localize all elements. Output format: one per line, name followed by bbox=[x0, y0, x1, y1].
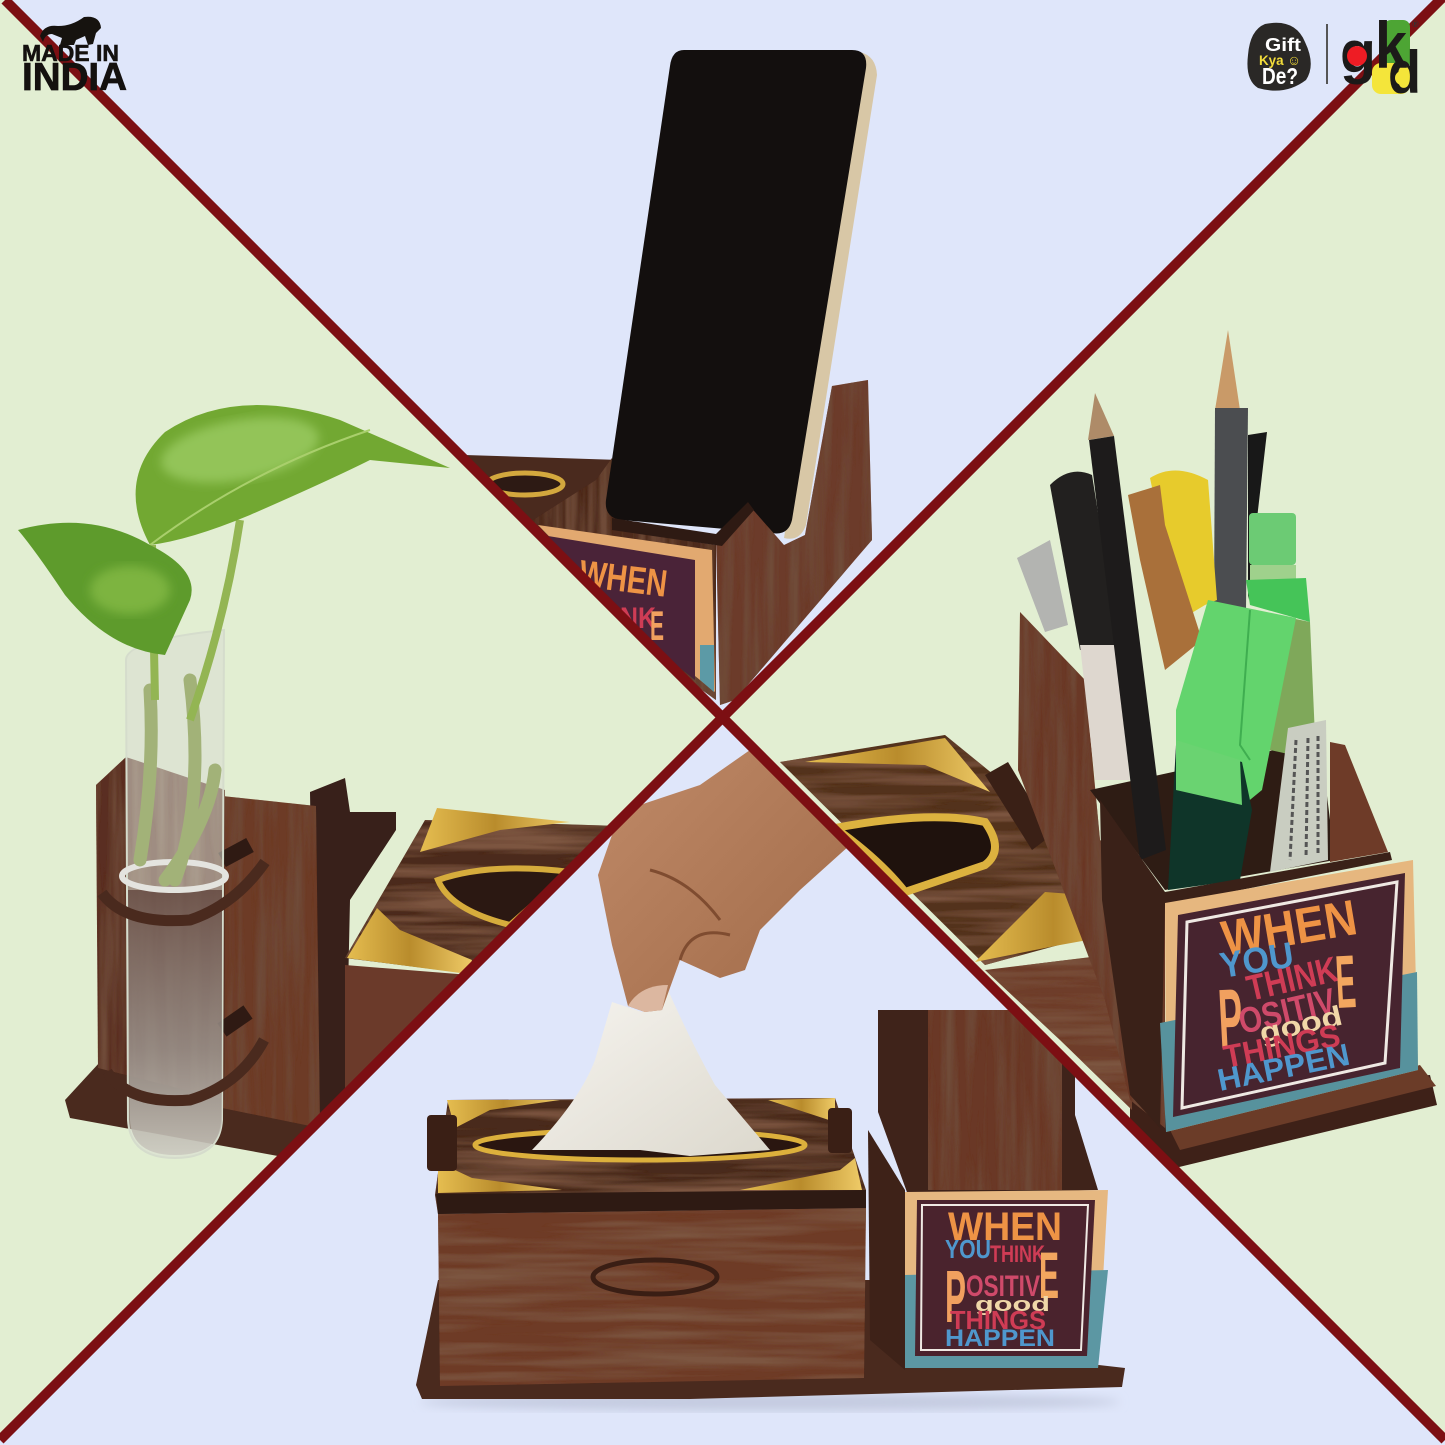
gold corners bbox=[438, 1098, 862, 1193]
text: de: De? bbox=[1262, 63, 1298, 89]
highlighter: collar bbox=[1176, 740, 1242, 805]
text: india: INDIA bbox=[22, 56, 127, 99]
tube: white marker barrel bbox=[1080, 645, 1130, 780]
logo separator bbox=[1326, 24, 1328, 84]
text: kya: Kya ☺ bbox=[1259, 52, 1301, 68]
panel: bottom, tissue box bbox=[416, 745, 1125, 1411]
yellow block bbox=[1372, 63, 1410, 94]
gold corners bbox=[806, 738, 1083, 962]
motivational card: WHEN bbox=[577, 553, 669, 606]
card holder back bbox=[878, 1010, 1098, 1195]
gold corners bbox=[347, 808, 570, 974]
tissue box lid bbox=[435, 1098, 866, 1214]
wooden base bbox=[1130, 1075, 1437, 1168]
yellow counter bbox=[1395, 71, 1409, 85]
background: left green panel bbox=[0, 0, 722, 1440]
tube clips back bbox=[222, 845, 250, 1030]
leaf: large bbox=[136, 405, 450, 545]
card text: YOU bbox=[1217, 934, 1296, 986]
card text: good bbox=[1256, 1000, 1345, 1049]
plant roots bbox=[140, 680, 215, 880]
wooden base bbox=[65, 1064, 308, 1156]
highlighter: dark body bbox=[1168, 745, 1252, 890]
lid tab bbox=[985, 762, 1044, 850]
text: g: g bbox=[1340, 20, 1376, 85]
phone gold edge bbox=[784, 52, 877, 539]
text: d: d bbox=[1388, 39, 1421, 106]
spray bottle bbox=[1246, 513, 1316, 760]
card text: good bbox=[975, 1294, 1050, 1316]
card text: HAPPEN bbox=[945, 1325, 1055, 1352]
back dark wooden panel bbox=[310, 778, 396, 1130]
test tube bbox=[122, 630, 226, 1158]
card text: WHEN bbox=[1218, 889, 1361, 967]
tissue box tabs bbox=[427, 1108, 852, 1171]
wooden panel right of tube bbox=[222, 796, 320, 1128]
text: k: k bbox=[1375, 8, 1407, 82]
pen: silver tip bbox=[1017, 540, 1068, 632]
green block bbox=[1384, 20, 1410, 70]
card text: P bbox=[945, 1255, 966, 1338]
plant stems bbox=[152, 520, 240, 720]
card text: OSITIV bbox=[966, 1270, 1040, 1303]
badge: Made in India bbox=[22, 17, 127, 99]
red dot bbox=[1347, 46, 1367, 66]
card text: THINK bbox=[1243, 948, 1341, 1009]
card text: THINGS bbox=[1220, 1017, 1343, 1075]
phone screen bbox=[606, 50, 866, 533]
holder right wall bbox=[1330, 742, 1388, 862]
tissue box front bbox=[985, 952, 1132, 1110]
background: right green panel bbox=[722, 0, 1445, 1440]
holder front left wall bbox=[1100, 800, 1392, 1128]
card text: E bbox=[1039, 1238, 1059, 1312]
tissue box front bbox=[438, 1208, 866, 1386]
card text bbox=[1214, 889, 1361, 1098]
pen: yellow bbox=[1150, 470, 1217, 620]
wooden panel left of tube bbox=[96, 757, 225, 1100]
stand left wooden wall bbox=[530, 458, 716, 700]
label on tube bbox=[1270, 720, 1328, 872]
logo blob bbox=[1247, 23, 1311, 91]
tube clips front bbox=[102, 862, 265, 1101]
motivational card: NK bbox=[620, 602, 656, 635]
wooden base bbox=[416, 1280, 1125, 1399]
base shadow bbox=[420, 1393, 1120, 1411]
tissue bbox=[532, 990, 770, 1156]
card text: P bbox=[1216, 971, 1245, 1066]
card text bbox=[945, 1205, 1062, 1352]
card holder side wall bbox=[868, 1130, 905, 1370]
grain knot bbox=[593, 1260, 717, 1294]
stand top rim bbox=[612, 502, 754, 546]
card text: E bbox=[1333, 939, 1358, 1024]
lid edge bbox=[436, 1190, 866, 1214]
tissue box lid bbox=[780, 735, 1065, 965]
motivational card: E bbox=[650, 602, 664, 649]
text: gift: Gift bbox=[1265, 35, 1301, 55]
stand right wooden wall bbox=[716, 380, 872, 705]
card bbox=[905, 1190, 1108, 1368]
tissue box slot bbox=[438, 868, 570, 925]
card text: WHEN bbox=[948, 1205, 1062, 1249]
card text: HAPPEN bbox=[1214, 1037, 1353, 1098]
card text: THINK bbox=[990, 1241, 1045, 1268]
registered mark: ® bbox=[1412, 19, 1419, 29]
card text: YOU bbox=[945, 1234, 991, 1264]
tissue slot bbox=[475, 1130, 805, 1160]
hand bbox=[598, 745, 850, 1012]
motivational card bbox=[538, 525, 715, 692]
panel: left, plant holder bbox=[18, 405, 620, 1160]
holder interior bbox=[1090, 740, 1335, 890]
leaf: small bbox=[18, 523, 192, 655]
text: made in: MADE IN bbox=[22, 40, 119, 66]
motivational card bbox=[1160, 860, 1418, 1132]
card text: OSITIV bbox=[1235, 980, 1339, 1042]
marker: black bbox=[1050, 472, 1120, 650]
pencil: black bbox=[1088, 393, 1166, 860]
panel: top, phone stand bbox=[465, 50, 877, 705]
logo: Gift Kya De bbox=[1247, 23, 1311, 91]
panel: right, pen holder bbox=[780, 330, 1437, 1168]
pencil: tall bbox=[1214, 330, 1267, 610]
icon: lion bbox=[40, 17, 101, 45]
highlighter: light green bbox=[1176, 600, 1296, 808]
pen: wooden bbox=[1128, 485, 1202, 670]
card holder interior bbox=[928, 1010, 1062, 1190]
tissue box lid bbox=[345, 820, 620, 975]
holder back panel bbox=[1018, 612, 1165, 1128]
tissue box front bbox=[345, 965, 459, 1088]
tissue box behind stand bbox=[467, 455, 611, 520]
logo: gkd bbox=[1340, 8, 1421, 106]
card text: THINGS bbox=[950, 1305, 1046, 1335]
tissue slot bbox=[835, 817, 995, 892]
